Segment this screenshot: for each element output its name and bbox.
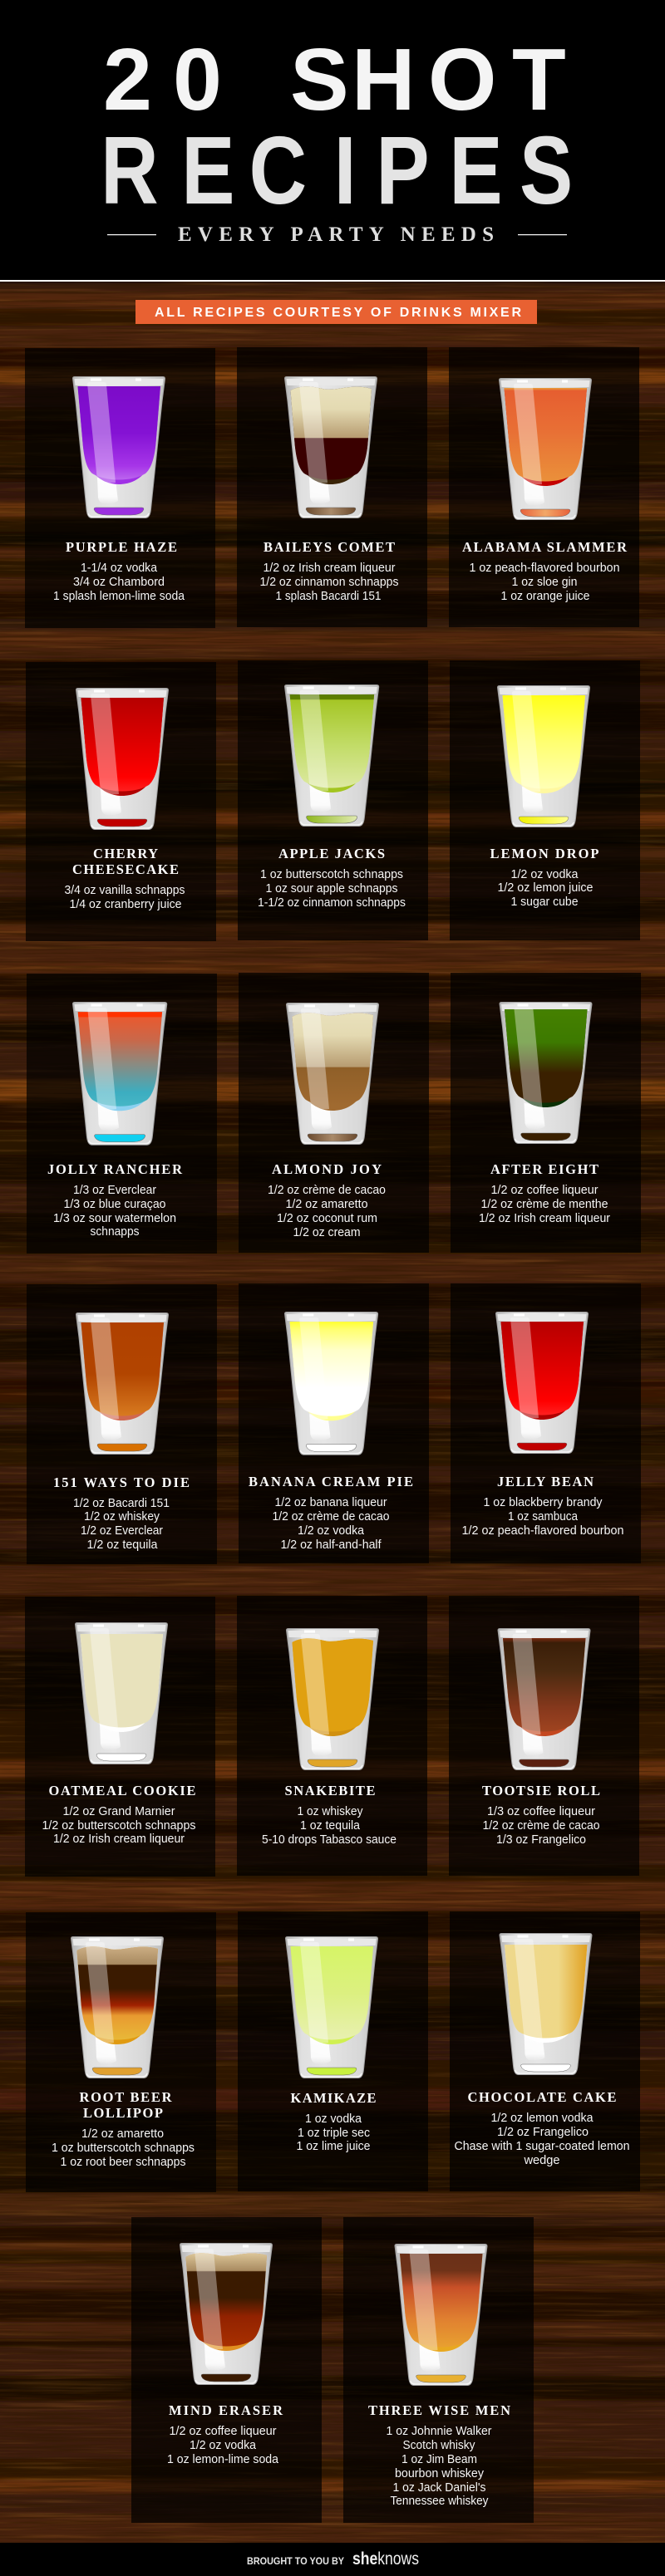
- ingredients: 1 oz Jim Beam: [401, 2453, 477, 2466]
- recipe name: JOLLY RANCHER: [47, 1161, 183, 1177]
- ingredients: 1/3 oz blue curaçao: [63, 1198, 166, 1211]
- title: 20 SHOT: 20 SHOT: [0, 31, 566, 129]
- recipe name: CHOCOLATE CAKE: [467, 2089, 617, 2105]
- ingredients: Scotch whisky: [402, 2439, 475, 2452]
- recipe name: THREE WISE MEN: [368, 2402, 510, 2418]
- ingredients: 1/2 oz crème de cacao: [268, 1184, 386, 1197]
- panel: Root Beer Lollipop: [26, 1912, 216, 2192]
- icon: golden shot glass: [286, 1628, 379, 1769]
- recipe name: LOLLIPOP: [83, 2105, 163, 2121]
- ingredients: 1 oz root beer schnapps: [60, 2156, 186, 2169]
- panel: Apple Jacks: [238, 660, 428, 940]
- ingredients: [268, 1184, 386, 1239]
- ingredients: 1/2 oz whiskey: [84, 1510, 160, 1524]
- ingredients: 3/4 oz vanilla schnapps: [65, 884, 185, 897]
- ingredients: 1/3 oz sour watermelon: [53, 1212, 176, 1225]
- ingredients: 1/2 oz butterscotch schnapps: [42, 1819, 196, 1833]
- recipe name: CHERRY: [93, 846, 158, 861]
- panel: Purple Haze: [25, 348, 215, 628]
- ingredients: 1 oz sour apple schnapps: [266, 882, 397, 895]
- ingredients: 1 oz sambuca: [508, 1510, 579, 1524]
- recipe name: [72, 846, 179, 877]
- ingredients: 1/2 oz vodka: [190, 2439, 257, 2452]
- icon: pale gold shot glass: [500, 1934, 592, 2075]
- icon: dark brown shot glass: [498, 1628, 590, 1769]
- ingredients: 1/2 oz Bacardi 151: [73, 1497, 170, 1510]
- ingredients: 1/2 oz Irish cream liqueur: [263, 562, 396, 575]
- ingredients: [497, 868, 594, 909]
- ingredients: 1/2 oz Everclear: [81, 1524, 163, 1538]
- ingredients: [296, 2112, 371, 2153]
- ingredients: 1 oz whiskey: [298, 1805, 363, 1818]
- icon: cream and brown shot glass: [286, 1003, 379, 1145]
- recipe name: 151 WAYS TO DIE: [53, 1474, 190, 1490]
- ingredients: 1/3 oz Everclear: [73, 1184, 156, 1197]
- recipe name: LEMON DROP: [490, 846, 598, 861]
- ingredients: 1/2 oz amaretto: [81, 2127, 164, 2141]
- ingredients: [462, 1496, 623, 1538]
- panel: Chocolate Cake: [450, 1911, 640, 2191]
- ingredients: 1/2 oz coffee liqueur: [170, 2425, 277, 2438]
- header block: [0, 0, 665, 282]
- panel: Jelly Bean: [451, 1283, 641, 1563]
- ingredients: [42, 1805, 196, 1846]
- icon: green shot glass: [285, 684, 379, 826]
- ingredients: 1/2 oz amaretto: [286, 1198, 367, 1211]
- panel: 151 Ways to Die: [27, 1284, 217, 1564]
- footer: [0, 2543, 665, 2576]
- ingredients: 1/4 oz cranberry juice: [70, 898, 181, 911]
- icon: bright red shot glass: [495, 1313, 589, 1454]
- recipe name: ALMOND JOY: [272, 1161, 382, 1177]
- icon: lime shot glass: [286, 1937, 377, 2078]
- ingredients: 1/2 oz Grand Marnier: [63, 1805, 175, 1818]
- banner: recipes courtesy: [135, 300, 537, 324]
- ingredients: [53, 562, 185, 603]
- ingredients: 1/2 oz half-and-half: [281, 1538, 382, 1552]
- panel: Baileys Comet: [237, 347, 427, 627]
- icon: cream shot glass: [75, 1623, 168, 1764]
- ingredients: [258, 868, 406, 910]
- ingredients: 1 splash Bacardi 151: [276, 590, 381, 603]
- panel: Alabama Slammer: [449, 347, 639, 627]
- ingredients: 5-10 drops Tabasco sauce: [262, 1833, 397, 1847]
- ingredients: 1 sugar cube: [510, 895, 579, 909]
- ingredients: 1 oz orange juice: [500, 590, 590, 603]
- ingredients: [469, 562, 620, 603]
- ingredients: [259, 562, 399, 603]
- panel: Kamikaze: [238, 1911, 428, 2191]
- ingredients: 1/2 oz crème de cacao: [273, 1510, 389, 1524]
- ingredients: 1/2 oz cinnamon schnapps: [259, 576, 399, 589]
- ingredients: 1/2 oz tequila: [86, 1538, 158, 1552]
- recipe name: OATMEAL COOKIE: [48, 1783, 196, 1798]
- icon: amber shot glass: [76, 1313, 168, 1454]
- ingredients: 1 oz Johnnie Walker: [386, 2425, 492, 2438]
- ingredients: 1/2 oz vodka: [298, 1524, 365, 1538]
- ingredients: 1 oz triple sec: [298, 2127, 370, 2140]
- recipe name: AFTER EIGHT: [490, 1161, 598, 1177]
- ingredients: 1/2 oz Frangelico: [497, 2126, 589, 2139]
- ingredients: [386, 2425, 492, 2508]
- panel: Snakebite: [237, 1596, 427, 1876]
- ingredients: 1/2 oz crème de cacao: [482, 1819, 600, 1833]
- recipe name: BANANA CREAM PIE: [249, 1474, 413, 1489]
- recipe name: PURPLE HAZE: [66, 539, 177, 555]
- ingredients: [53, 1184, 176, 1239]
- recipe name: CHEESECAKE: [72, 861, 179, 877]
- ingredients: Tennessee whiskey: [391, 2495, 489, 2508]
- ingredients: [167, 2425, 279, 2466]
- ingredients: 1 splash lemon-lime soda: [53, 590, 185, 603]
- subtitle: EVERY PARTY NEEDS: [178, 223, 494, 246]
- panel: Oatmeal Cookie: [25, 1597, 215, 1877]
- icon: orange shot glass: [499, 379, 592, 520]
- ingredients: [52, 2127, 195, 2169]
- ingredients: [73, 1497, 170, 1552]
- ingredients: 1/3 oz Frangelico: [496, 1833, 586, 1847]
- ingredients: 1 oz blackberry brandy: [484, 1496, 603, 1509]
- panel: Lemon Drop: [450, 660, 640, 940]
- recipe name: BAILEYS COMET: [264, 539, 395, 555]
- panel: After Eight: [451, 973, 641, 1253]
- icon: foam and dark red shot glass: [180, 2243, 273, 2384]
- panel: Mind Eraser: [131, 2217, 322, 2523]
- ingredients: 1-1/2 oz cinnamon schnapps: [258, 896, 406, 910]
- ingredients: [273, 1496, 389, 1552]
- ingredients: Chase with 1 sugar-coated lemon: [454, 2140, 630, 2153]
- banner: recipes courtesy: ALL RECIPES COURTESY OF DRINKS MIXER: [155, 306, 521, 320]
- recipe name: APPLE JACKS: [278, 846, 385, 861]
- footer credit: BROUGHT TO YOU BY: [247, 2555, 344, 2567]
- ingredients: 1 oz vodka: [305, 2112, 362, 2126]
- ingredients: 1 oz lemon-lime soda: [167, 2453, 279, 2466]
- icon: purple shot glass: [73, 377, 165, 518]
- recipe name: MIND ERASER: [169, 2402, 283, 2418]
- ingredients: 1/2 oz cream: [293, 1226, 361, 1239]
- icon: red shot glass: [76, 688, 168, 829]
- ingredients: [479, 1184, 610, 1225]
- ingredients: 1/2 oz lemon vodka: [490, 2112, 594, 2125]
- ingredients: 1/2 oz lemon juice: [497, 881, 594, 895]
- panel: Banana Cream Pie: [239, 1283, 429, 1563]
- ingredients: 1 oz Jack Daniel's: [392, 2481, 485, 2495]
- panel: Almond Joy: [239, 973, 429, 1253]
- recipe name: TOOTSIE ROLL: [482, 1783, 600, 1798]
- logo: sheknows: sheknows: [352, 2549, 419, 2569]
- panel: Cherry Cheesecake: [26, 662, 216, 941]
- ingredients: 1/2 oz coffee liqueur: [490, 1184, 598, 1197]
- recipe name: JELLY BEAN: [497, 1474, 594, 1489]
- ingredients: [65, 884, 185, 911]
- icon: red to blue shot glass: [73, 1003, 167, 1145]
- ingredients: 1 oz peach-flavored bourbon: [469, 562, 620, 575]
- icon: yellow shot glass: [497, 686, 590, 827]
- ingredients: 1-1/4 oz vodka: [81, 562, 158, 575]
- icon: whiskey shot glass: [395, 2245, 487, 2386]
- ingredients: 1/2 oz peach-flavored bourbon: [462, 1524, 623, 1538]
- ingredients: 1/2 oz Irish cream liqueur: [479, 1212, 610, 1225]
- icon: cream and dark shot glass: [284, 377, 377, 518]
- panel: Three Wise Men: [343, 2217, 534, 2523]
- ingredients: [454, 2112, 630, 2167]
- icon: pale yellow shot glass: [285, 1313, 378, 1455]
- ingredients: 1/2 oz coconut rum: [277, 1212, 377, 1225]
- ingredients: [262, 1805, 397, 1847]
- recipe name: ROOT BEER: [80, 2089, 173, 2105]
- panel: Tootsie Roll: [449, 1596, 639, 1876]
- ingredients: 1 oz sloe gin: [512, 576, 577, 589]
- ingredients: 1 oz tequila: [300, 1819, 361, 1833]
- ingredients: 1/3 oz coffee liqueur: [487, 1805, 595, 1818]
- ingredients: 1 oz lime juice: [296, 2140, 371, 2153]
- ingredients: 1/2 oz vodka: [510, 868, 579, 881]
- ingredients: bourbon whiskey: [395, 2467, 485, 2480]
- ingredients: wedge: [523, 2154, 560, 2167]
- icon: layered root beer shot glass: [71, 1937, 163, 2078]
- title: RECIPES: RECIPES: [101, 117, 573, 224]
- icon: green and brown shot glass: [500, 1002, 592, 1143]
- ingredients: 1/2 oz banana liqueur: [274, 1496, 387, 1509]
- recipe name: KAMIKAZE: [291, 2090, 376, 2106]
- recipe name: ALABAMA SLAMMER: [462, 539, 628, 555]
- ingredients: 3/4 oz Chambord: [73, 576, 165, 589]
- ingredients: 1/2 oz Irish cream liqueur: [53, 1833, 185, 1846]
- ingredients: 1 oz butterscotch schnapps: [52, 2142, 195, 2155]
- ingredients: 1/2 oz crème de menthe: [480, 1198, 608, 1211]
- recipe name: [80, 2089, 173, 2121]
- recipe name: SNAKEBITE: [284, 1783, 376, 1798]
- ingredients: [482, 1805, 600, 1847]
- ingredients: schnapps: [90, 1225, 140, 1239]
- panel: Jolly Rancher: [27, 974, 217, 1254]
- ingredients: 1 oz butterscotch schnapps: [260, 868, 403, 881]
